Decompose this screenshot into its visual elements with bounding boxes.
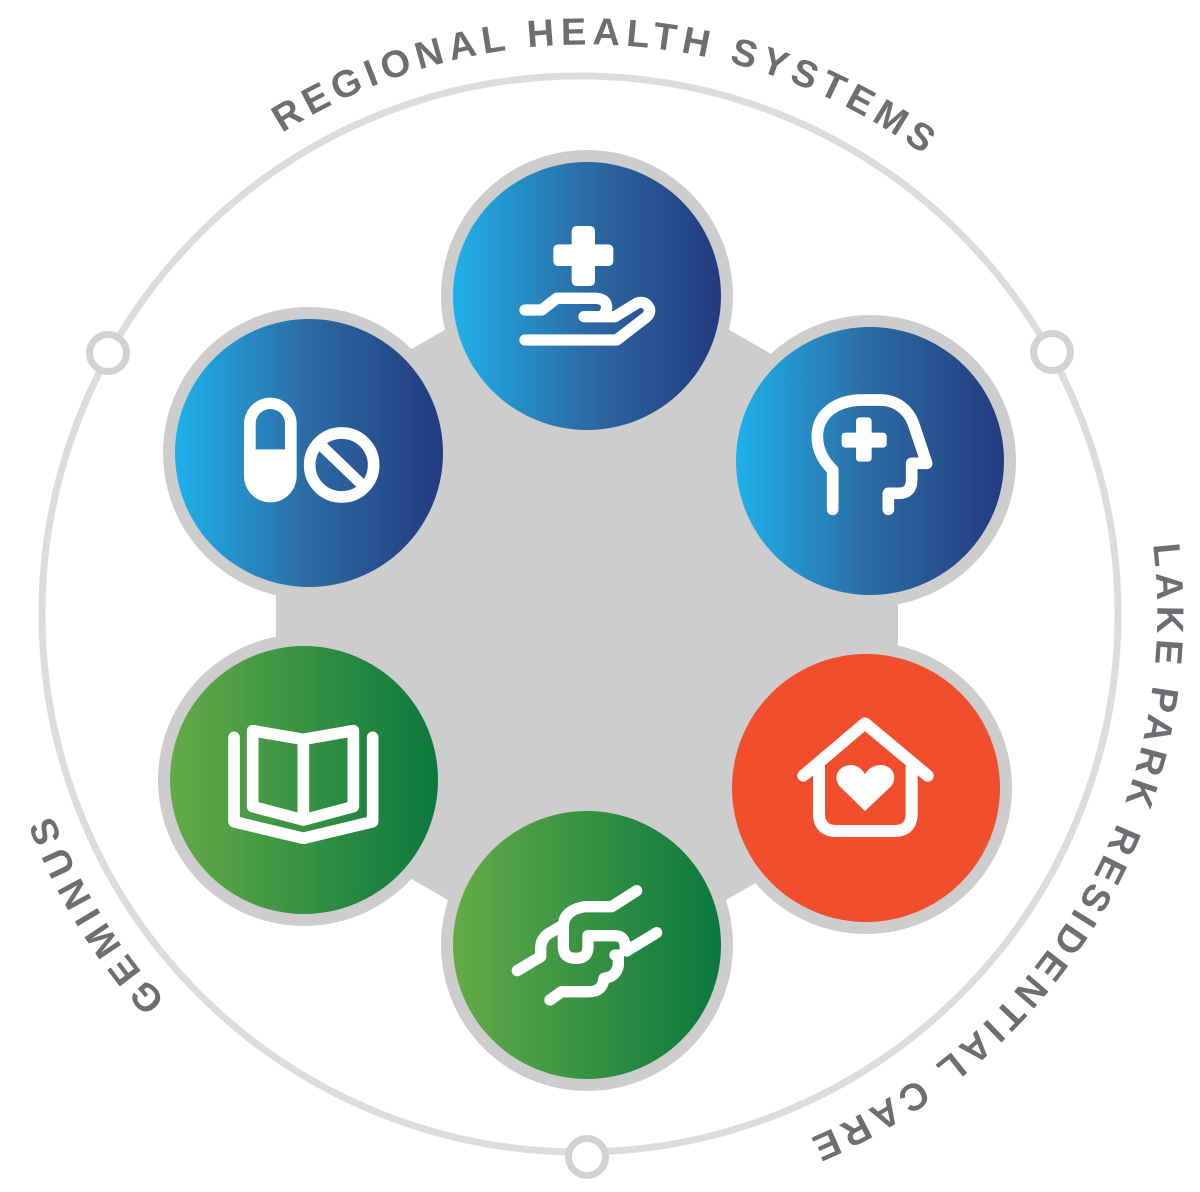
- panel: handshake: [441, 799, 733, 1091]
- icon: pill and no symbol: [244, 398, 374, 502]
- ring node: left: [90, 334, 126, 372]
- icon: open book: [234, 731, 373, 838]
- icon: linked hands: [517, 891, 657, 1000]
- icon: house with heart: [803, 723, 928, 831]
- panel: house with heart: [720, 642, 1012, 934]
- panel: pill with prohibition sign: [163, 307, 455, 599]
- panel: head with medical cross: [724, 315, 1016, 607]
- ring node: right: [1034, 334, 1070, 370]
- central grey hexagon: [276, 248, 898, 980]
- panel: open book: [158, 634, 450, 926]
- icon: head with cross: [817, 400, 927, 509]
- label: Geminus: GEMINUS: [31, 818, 160, 1012]
- label: Regional Health Systems: REGIONAL HEALTH SYSTEMS: [270, 18, 934, 150]
- icon: hand with cross: [525, 226, 650, 340]
- ring node: bottom: [568, 1138, 606, 1176]
- panel: hand with medical cross: [441, 150, 733, 442]
- label: Lake Park Residential Care: LAKE PARK RESIDENTIAL CARE: [812, 544, 1184, 1162]
